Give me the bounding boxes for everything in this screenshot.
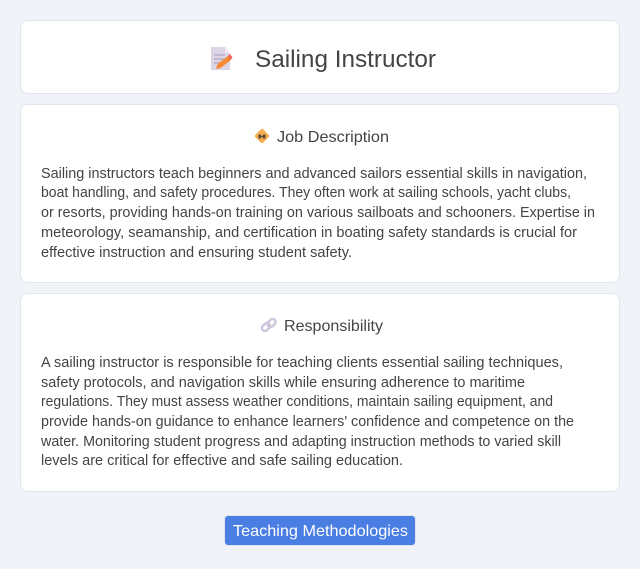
text block: responsibility: A sailing instructor is responsible for teaching clients essential sailing techniques, bbox=[41, 355, 563, 371]
text block: job description: boat handling, and safety procedures. They often work at sailing schools, yacht clubs, bbox=[41, 185, 571, 201]
panel: responsibility card bbox=[20, 293, 620, 492]
text block: job description: Sailing instructors teach beginners and advanced sailors essential skills in navigation, bbox=[41, 166, 587, 182]
text block: responsibility bbox=[40, 355, 574, 469]
text block: responsibility: provide hands-on guidance to enhance learners' confidence and competence on the bbox=[41, 414, 574, 430]
icon: diamond road sign bbox=[254, 128, 270, 144]
icon: chain link bbox=[261, 318, 277, 332]
panel: job description card bbox=[20, 104, 620, 283]
text block: responsibility: water. Monitoring student progress and adapting instruction methods to varied skill bbox=[40, 434, 561, 450]
text block: job description bbox=[41, 166, 595, 261]
text block: job description: effective instruction and ensuring student safety. bbox=[41, 245, 352, 261]
text block: job description: meteorology, seamanship, and certification in boating safety standards is crucial for bbox=[41, 225, 577, 241]
title: Sailing Instructor bbox=[255, 46, 436, 73]
text block: responsibility: safety protocols, and navigation skills while ensuring adherence to maritime bbox=[41, 375, 525, 391]
button label: Teaching Methodologies bbox=[233, 523, 408, 540]
panel: title card bbox=[20, 20, 620, 94]
heading: job description: Job Description bbox=[277, 129, 389, 146]
heading: responsibility: Responsibility bbox=[284, 318, 383, 335]
button background: teaching methodologies bbox=[225, 516, 415, 545]
icon: document with pencil bbox=[211, 47, 232, 70]
text block: responsibility: levels are critical for effective and safe sailing education. bbox=[41, 453, 403, 469]
text block: job description: or resorts, providing hands-on training on various sailboats and schooners. Expertise in bbox=[41, 205, 595, 221]
text block: responsibility: regulations. They must assess weather conditions, maintain sailing equipment, and bbox=[41, 394, 553, 410]
